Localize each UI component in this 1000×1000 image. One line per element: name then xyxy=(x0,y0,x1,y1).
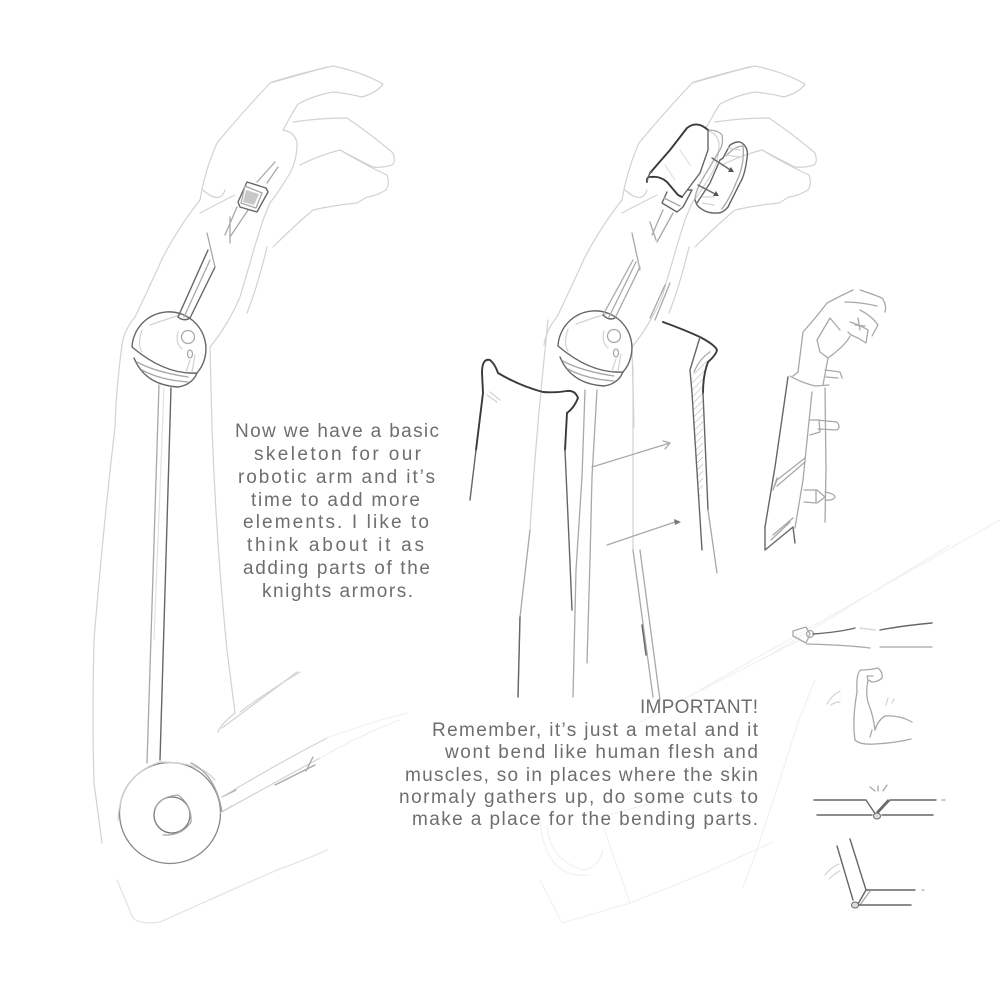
right hand: hand armor plate in front xyxy=(647,124,708,197)
left arm: upper rod xyxy=(147,385,171,763)
right hand: band behind the armor plates xyxy=(695,130,722,200)
small sketch: armor bend with cut, straight xyxy=(814,785,945,819)
small sketch: straight arm xyxy=(793,623,932,648)
small sketch: armor bend with cut, bent xyxy=(825,839,924,908)
left arm: elbow disk joint xyxy=(118,762,222,864)
right arm sketch: faint outline of arm and hand xyxy=(530,66,1000,923)
instruction text: basic skeleton: think about it as xyxy=(247,535,424,556)
right arm: armor lines of the lower sleeve xyxy=(518,390,660,700)
left arm: robotic wrist rod and ring joint xyxy=(178,162,278,320)
instruction text: basic skeleton: adding parts of the xyxy=(243,558,430,579)
instruction text: basic skeleton: robotic arm and it’s xyxy=(238,467,435,488)
right arm: forearm armor plate (left) xyxy=(470,360,578,610)
arrow: armor plate moves to arm, lower xyxy=(607,519,681,545)
arrow: armor plate moves to arm xyxy=(592,441,670,467)
right arm: shoulder ball joint xyxy=(558,311,632,386)
left arm: forearm rod xyxy=(220,713,407,813)
right arm: back plate with hatched thickness xyxy=(663,322,717,573)
instruction text: basic skeleton: skeleton for our xyxy=(254,444,422,465)
instruction text: important note about bending: muscles, so in places where the skin xyxy=(405,765,758,786)
left arm: shoulder ball joint xyxy=(132,312,206,387)
instruction text: basic skeleton xyxy=(235,421,439,602)
instruction text: important note about bending xyxy=(399,697,759,830)
right hand: palm armor plate with rim xyxy=(695,142,747,213)
small thumbnail sketch: armored arm xyxy=(765,290,886,550)
right arm: wrist rod and ring joint xyxy=(603,190,692,319)
instruction text: important note about bending: IMPORTANT! xyxy=(640,697,758,718)
instruction text: basic skeleton: time to add more xyxy=(251,490,420,511)
instruction text: basic skeleton: Now we have a basic xyxy=(235,421,439,442)
instruction text: important note about bending: normaly gathers up, do some cuts to xyxy=(399,787,758,808)
instruction text: important note about bending: make a place for the bending parts. xyxy=(412,809,758,830)
left arm sketch: outline of arm and hand xyxy=(93,66,394,923)
instruction text: basic skeleton: knights armors. xyxy=(262,581,413,602)
instruction text: basic skeleton: elements. I like to xyxy=(243,512,429,533)
instruction text: important note about bending: Remember, it’s just a metal and it xyxy=(432,720,759,741)
small sketch: flexed bicep xyxy=(827,668,912,744)
instruction text: important note about bending: wont bend like human flesh and xyxy=(444,742,758,763)
arrows on hand armor xyxy=(698,158,734,196)
